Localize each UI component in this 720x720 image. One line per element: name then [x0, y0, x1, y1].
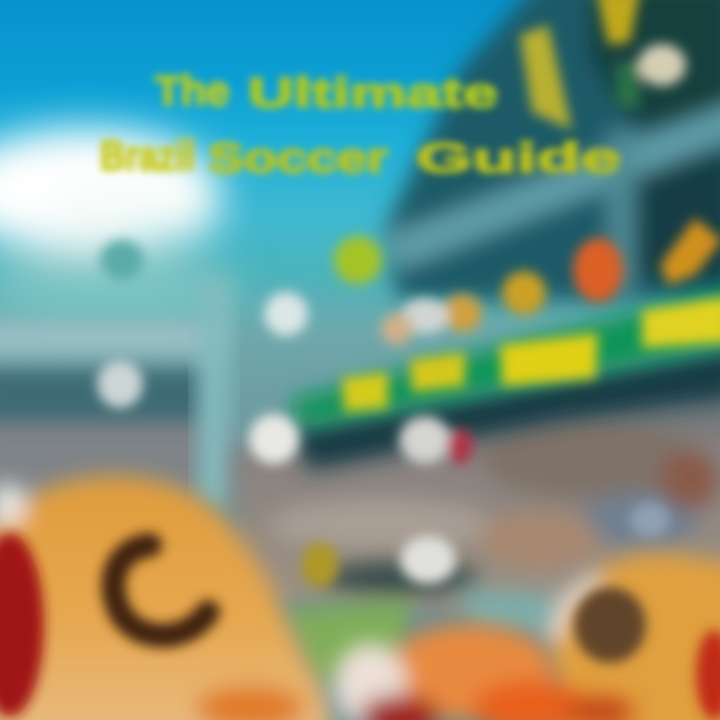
title text	[100, 67, 621, 181]
sun glare cloud	[0, 128, 240, 325]
yellow pennants upper right	[520, 0, 686, 130]
banner: green and yellow strip	[290, 285, 720, 428]
mascot: right plush figure	[550, 553, 720, 720]
circular colour badges	[97, 218, 720, 587]
mascot swirl eye	[113, 545, 208, 636]
left stand band	[0, 322, 230, 495]
mascot: left plush figure	[0, 476, 335, 720]
title text: Brazil	[100, 132, 195, 179]
crowd stands	[232, 370, 720, 620]
title text: Soccer	[208, 134, 388, 181]
title text: Ultimate	[248, 69, 498, 116]
mascot eye	[574, 587, 646, 663]
mascot: centre plush figure	[334, 624, 634, 720]
dark band under banner	[290, 345, 720, 470]
title text: Guide	[416, 134, 621, 181]
stadium goal post	[198, 280, 230, 505]
title text: The	[155, 67, 230, 114]
pitch	[285, 562, 560, 680]
stadium roof structure	[380, 0, 720, 300]
